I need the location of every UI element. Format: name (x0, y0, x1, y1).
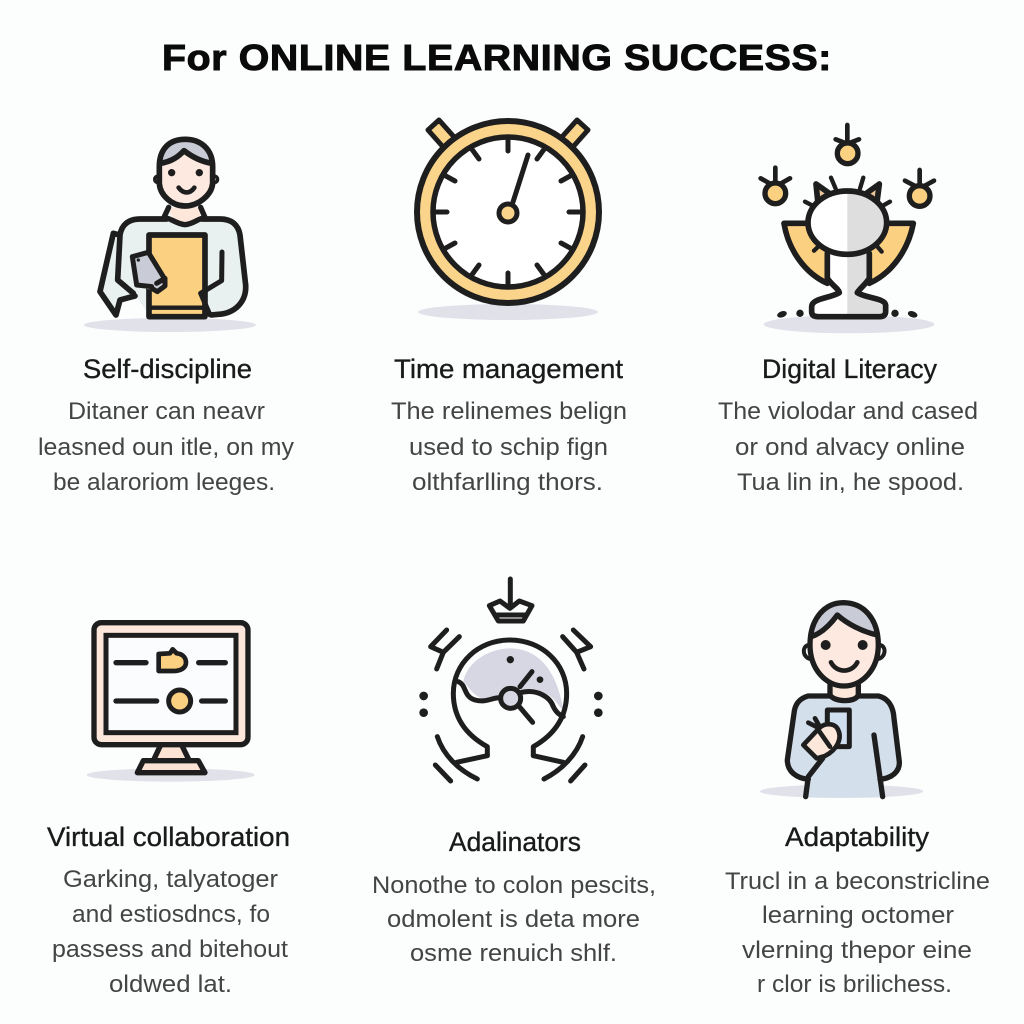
description: Adaptability: Trucl in a beconstricline (725, 868, 990, 895)
heading: Self-discipline: Self-discipline (83, 354, 252, 384)
panel: self-discipline (38, 139, 295, 496)
description: Self-discipline: be alaroriom leeges. (53, 469, 275, 496)
icon: computer monitor (87, 623, 255, 782)
description: Adaptability: r clor is brilichess. (757, 971, 952, 998)
icon: trophy with lights (761, 125, 934, 333)
panel: digital literacy (718, 125, 978, 496)
description: Virtual collaboration: oldwed lat. (109, 971, 232, 998)
panel: time management (391, 120, 627, 496)
description: Time management: used to schip fign (409, 434, 608, 461)
description: Digital Literacy: or ond alvacy online (735, 434, 965, 461)
panel: adaptability (725, 603, 990, 998)
description: Virtual collaboration: passess and bitehout (52, 936, 288, 963)
description: Digital Literacy (718, 398, 978, 496)
icon: stopwatch clock (417, 120, 599, 320)
description: Adaptability: vlerning thepor eine (742, 937, 972, 964)
description: Digital Literacy: The violodar and cased (718, 398, 978, 425)
description: Time management (391, 398, 627, 496)
description: Digital Literacy: Tua lin in, he spood. (737, 469, 964, 496)
description: Self-discipline: leasned oun itle, on my (38, 434, 295, 461)
description: Virtual collaboration: and estiosdncs, fo (72, 901, 270, 928)
icon: gauge with crown (419, 579, 603, 781)
description: Adaptability (725, 868, 990, 998)
panel: adalinators (372, 579, 656, 967)
description: Virtual collaboration: Garking, talyatoger (63, 866, 278, 893)
heading: Adaptability: Adaptability (785, 822, 930, 852)
description: Adalinators (372, 872, 656, 967)
description: Self-discipline (38, 398, 295, 496)
description: Adaptability: learning octomer (762, 902, 954, 929)
panel: virtual collaboration (47, 623, 290, 998)
description: Time management: The relinemes belign (391, 398, 627, 425)
description: Virtual collaboration (52, 866, 288, 998)
heading: Digital Literacy: Digital Literacy (762, 354, 937, 384)
description: Self-discipline: Ditaner can neavr (68, 398, 265, 425)
heading: Time management: Time management (394, 354, 623, 384)
heading: Virtual collaboration: Virtual collaboration (47, 822, 290, 852)
heading: Adalinators: Adalinators (449, 827, 581, 857)
description: Adalinators: osme renuich shlf. (410, 940, 617, 967)
icon: person holding phone (760, 603, 923, 798)
icon: person with notebook and phone (84, 139, 256, 332)
description: Adalinators: odmolent is deta more (387, 906, 640, 933)
description: Adalinators: Nonothe to colon pescits, (372, 872, 656, 899)
title: For ONLINE LEARNING SUCCESS: (162, 37, 832, 78)
description: Time management: olthfarlling thors. (412, 469, 603, 496)
